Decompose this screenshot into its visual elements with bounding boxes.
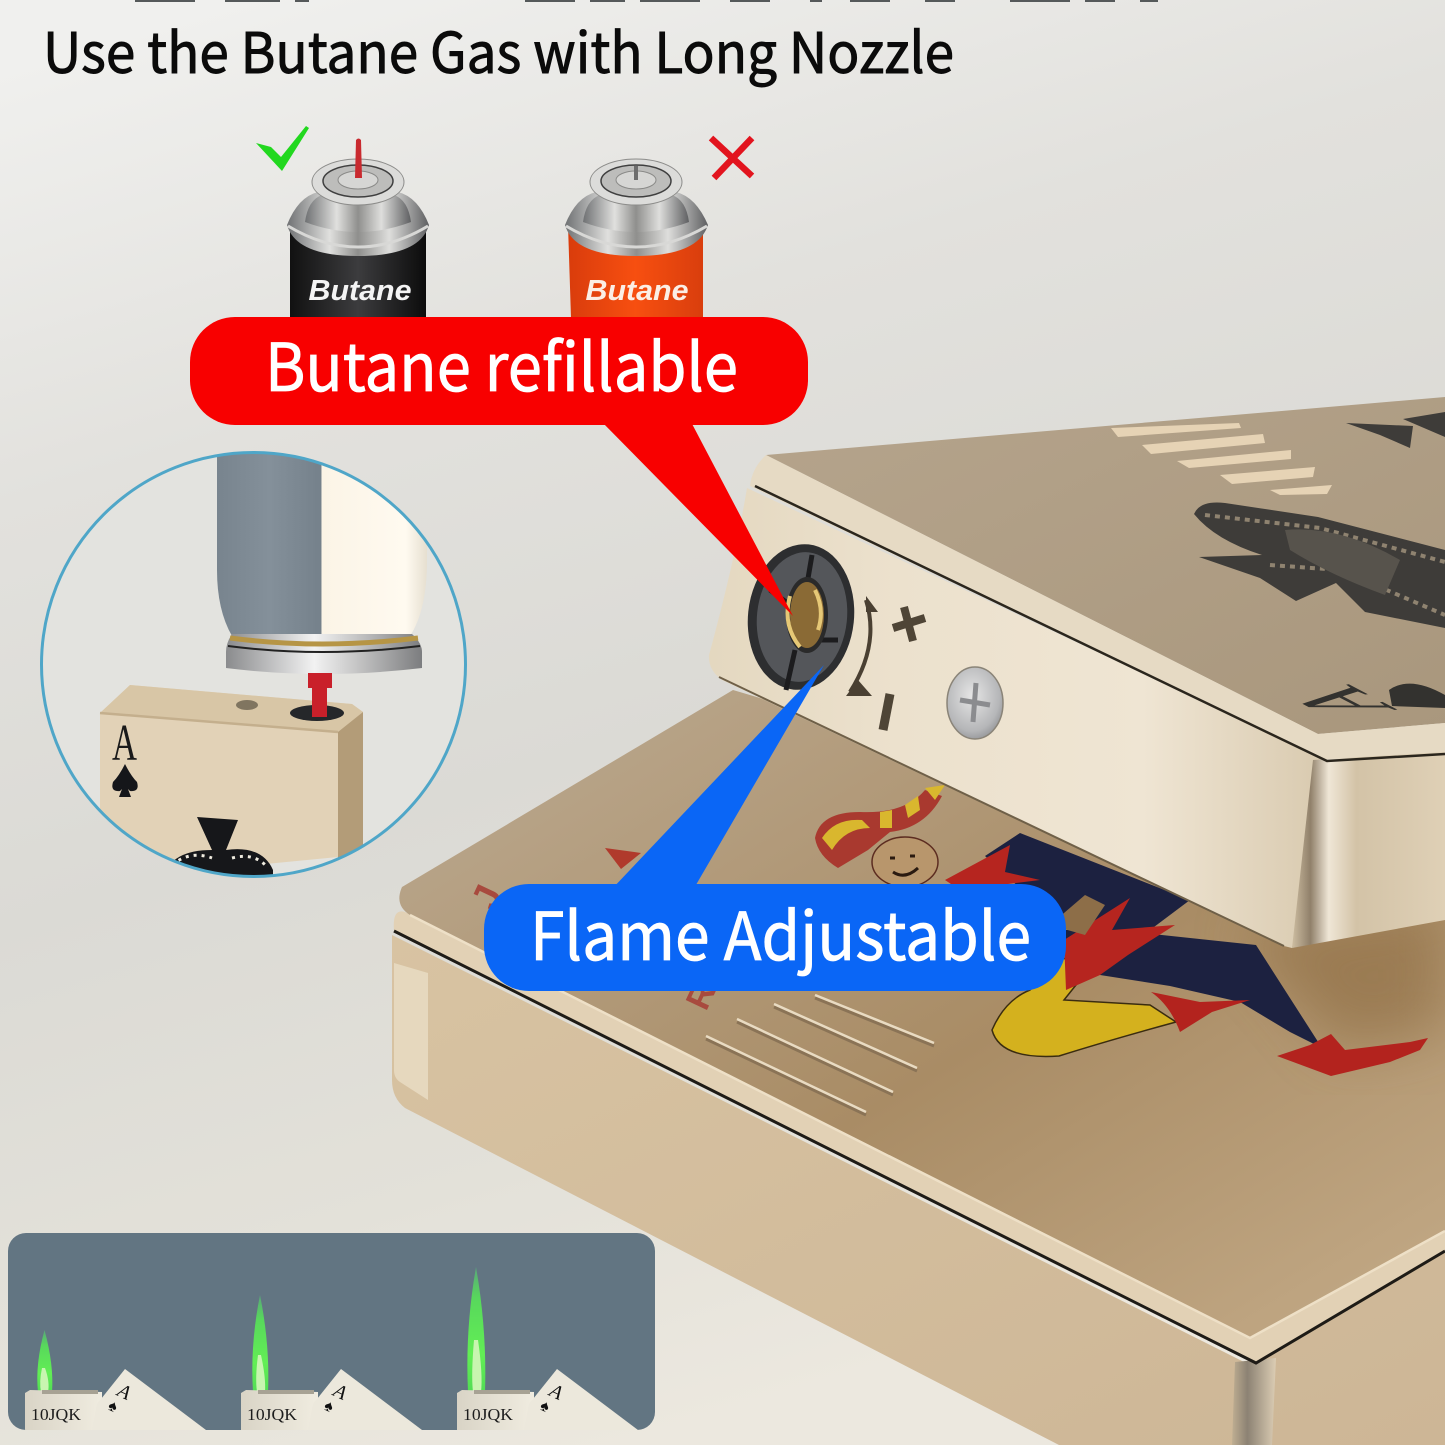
icon: red cross bbox=[711, 138, 752, 178]
refill valve bbox=[741, 539, 861, 695]
callout: Butane refillable: Butane refillable bbox=[265, 315, 738, 411]
low flame lighter bbox=[25, 1330, 206, 1430]
high flame lighter: A bbox=[544, 1379, 567, 1405]
high flame lighter bbox=[457, 1267, 638, 1430]
callout: Flame Adjustable: Flame Adjustable bbox=[530, 884, 1031, 980]
flame adjust markings bbox=[846, 596, 925, 730]
joker face bbox=[872, 837, 938, 887]
upper ace card lighter case: A bbox=[1256, 681, 1420, 721]
panel: flame height levels bbox=[8, 1233, 655, 1430]
high flame lighter: 10JQK bbox=[463, 1405, 514, 1424]
low flame lighter: ♠ bbox=[105, 1397, 121, 1416]
ace emblem bbox=[174, 817, 273, 875]
joker illustration: R bbox=[679, 977, 724, 1015]
vent stripes bbox=[1111, 423, 1332, 495]
butane can with long nozzle: Butane bbox=[308, 275, 412, 307]
callout: Flame Adjustable bbox=[484, 665, 1066, 991]
medium flame lighter: 10JQK bbox=[247, 1405, 298, 1424]
lighter bbox=[100, 685, 363, 880]
medium flame lighter bbox=[241, 1295, 422, 1430]
high flame lighter: ♠ bbox=[537, 1397, 553, 1416]
icon: green check bbox=[256, 126, 309, 171]
lower joker card lighter case bbox=[392, 690, 1445, 1445]
clipped text remnants at top edge bbox=[135, 0, 1158, 2]
upper ace card lighter case bbox=[709, 397, 1445, 948]
inset: refilling illustration bbox=[42, 440, 466, 885]
screw bbox=[947, 667, 1003, 739]
medium flame lighter: A bbox=[328, 1379, 351, 1405]
inset: refilling illustration: A bbox=[112, 715, 137, 772]
callout: Butane refillable bbox=[190, 315, 808, 616]
butane can with short nozzle bbox=[565, 159, 708, 318]
butane can with long nozzle bbox=[287, 138, 429, 318]
joker illustration bbox=[464, 785, 1428, 1076]
butane can with short nozzle: Butane bbox=[586, 275, 688, 307]
icon: spade bbox=[112, 764, 138, 797]
joker illustration: J bbox=[464, 879, 511, 916]
low flame lighter: 10JQK bbox=[31, 1405, 82, 1424]
title: Use the Butane Gas with Long Nozzle bbox=[43, 9, 954, 90]
low flame lighter: A bbox=[112, 1379, 135, 1405]
medium flame lighter: ♠ bbox=[321, 1397, 337, 1416]
joker hat bbox=[815, 790, 942, 868]
gas bottle bbox=[217, 440, 427, 636]
card stripes bbox=[706, 995, 934, 1115]
spade emblem bbox=[1194, 502, 1445, 628]
gold ring and silver disc bbox=[226, 634, 422, 674]
